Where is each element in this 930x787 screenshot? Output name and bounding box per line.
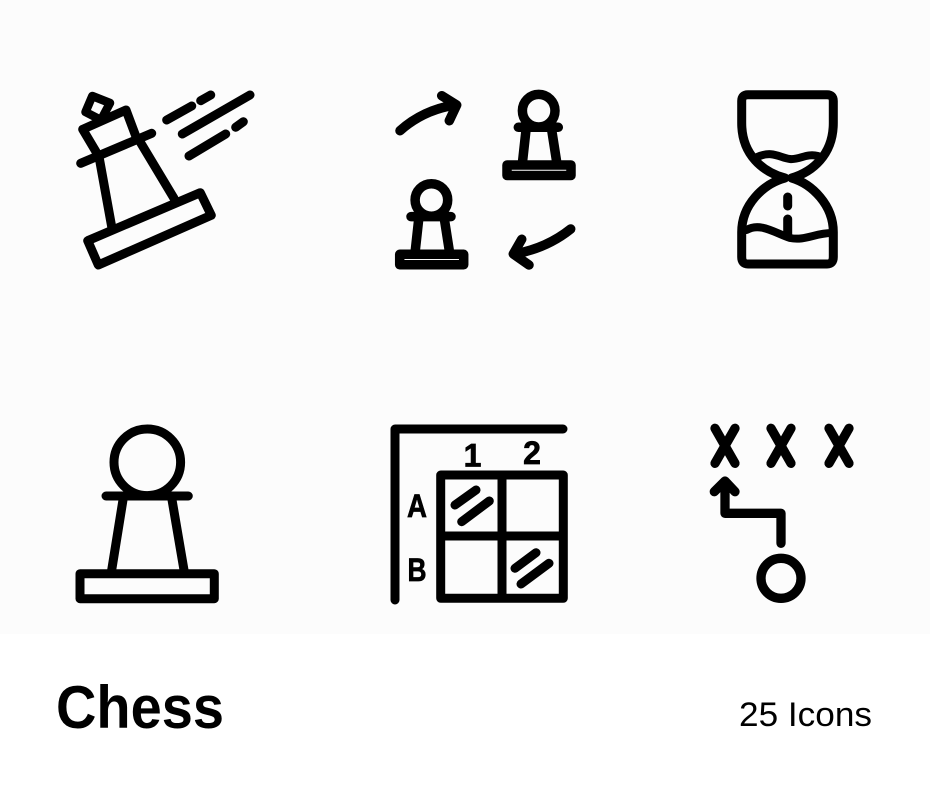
grid labels: B bbox=[408, 552, 426, 588]
icon: notation grid bbox=[395, 429, 563, 600]
icon: pawn bbox=[80, 429, 214, 599]
icon: hourglass bbox=[742, 95, 833, 264]
grid labels bbox=[407, 435, 541, 588]
icon: tactic play diagram bbox=[714, 428, 849, 598]
icon count: 25 Icons bbox=[739, 696, 872, 734]
grid labels: A bbox=[407, 488, 427, 524]
icon: swapping pawns with arrows bbox=[400, 94, 571, 265]
title: Chess bbox=[56, 674, 224, 741]
grid labels: 1 bbox=[464, 438, 481, 474]
grid labels: 2 bbox=[523, 435, 541, 471]
grid frame lines bbox=[395, 429, 563, 600]
icon: falling king with speed lines bbox=[81, 95, 250, 265]
